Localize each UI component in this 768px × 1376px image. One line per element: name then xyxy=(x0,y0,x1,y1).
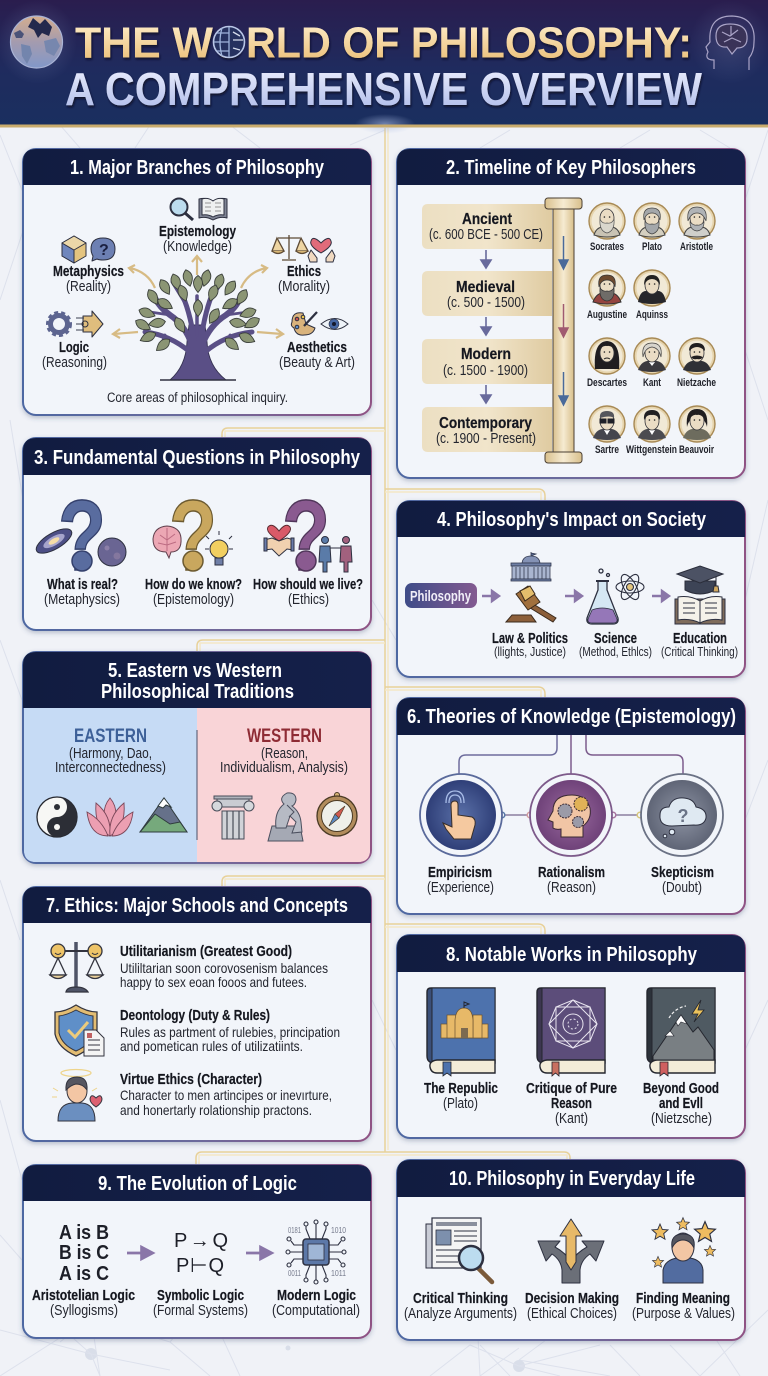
era: ancient: (c. 600 BCE - 500 CE) xyxy=(429,227,543,243)
label: empiricism xyxy=(427,865,494,896)
panel 8: notable works xyxy=(397,935,745,1138)
heading 6 xyxy=(397,698,745,735)
label: critique: Critique of Pure xyxy=(526,1081,617,1097)
portrait: Aristotle xyxy=(679,203,715,239)
label: critical thinking xyxy=(404,1291,517,1322)
syllogism statements xyxy=(59,1222,109,1285)
icon: eye xyxy=(321,318,348,330)
icon: cube xyxy=(62,236,86,263)
icon: scales xyxy=(272,235,308,260)
heading 1: 1. Major Branches of Philosophy xyxy=(70,157,325,179)
icon: heart in hands xyxy=(308,238,335,262)
arrow xyxy=(652,591,669,601)
syllogism statements: A is B xyxy=(59,1222,109,1244)
label: education xyxy=(661,631,738,659)
icon: computer chip: 0181 xyxy=(288,1226,301,1235)
arrow xyxy=(481,385,491,403)
label: finding meaning xyxy=(632,1291,735,1322)
text: virtue ethics xyxy=(120,1072,332,1118)
eastern text: (Harmony, Dao, xyxy=(69,746,152,762)
label: aristotelian: (Syllogisms) xyxy=(50,1303,118,1319)
label: critique xyxy=(526,1081,617,1127)
arrow xyxy=(246,1248,272,1258)
icon: graduation cap xyxy=(677,566,723,594)
label: modern: (Computational) xyxy=(272,1303,360,1319)
label: row 4 names xyxy=(595,444,715,456)
portrait: Plato xyxy=(634,203,670,239)
label: logic: Logic xyxy=(59,340,89,356)
label: modern: Modern Logic xyxy=(277,1288,356,1304)
text: virtue ethics: and honertarly rolationship practons. xyxy=(120,1102,312,1118)
text: virtue ethics: Character to men artincipes or inevırture, xyxy=(120,1087,332,1103)
text: deontology: Rules as partment of rulebies, principation xyxy=(120,1024,340,1040)
portrait: Beauvoir xyxy=(679,406,715,442)
portrait: Socrates xyxy=(589,203,625,239)
arrow xyxy=(565,591,582,601)
arrow xyxy=(482,591,499,601)
icon: thought cloud: ? xyxy=(678,806,688,826)
title: line 1: THE W xyxy=(75,18,213,68)
icon: tree xyxy=(133,269,262,380)
label: row 3 names: Nietzache xyxy=(677,377,716,389)
heading 1 xyxy=(23,149,371,185)
philosophy pill: Philosophy xyxy=(410,589,471,605)
western text: WESTERN xyxy=(247,726,322,747)
label: symbolic: (Formal Systems) xyxy=(153,1303,248,1319)
icon: logic arrow xyxy=(76,311,103,337)
label: row 4 names: Sartre xyxy=(595,444,619,456)
portrait: Sartre xyxy=(589,406,625,442)
era: medieval: Medieval xyxy=(456,279,515,296)
label: republic xyxy=(424,1081,498,1112)
title: line 1: O xyxy=(213,18,244,68)
label: aristotelian xyxy=(32,1288,135,1319)
label: row 3 names: Kant xyxy=(643,377,661,389)
era: ancient xyxy=(422,204,552,249)
heading 5: 5. Eastern vs Western xyxy=(108,660,282,682)
icon: head with gears xyxy=(548,795,590,837)
text: utilitarianism xyxy=(120,944,328,990)
label: beyond good and evil: and Evll xyxy=(659,1096,703,1112)
text: virtue ethics: Virtue Ethics (Character) xyxy=(120,1072,262,1088)
portrait: Augustine xyxy=(589,270,625,306)
icon: person with stars xyxy=(652,1218,716,1283)
icon: question bubble xyxy=(91,238,115,261)
label: row 2 names xyxy=(587,309,668,321)
label: critical thinking: (Analyze Arguments) xyxy=(404,1306,517,1322)
western background xyxy=(197,708,370,862)
syllogism statements: B is C xyxy=(59,1242,109,1264)
label: republic: The Republic xyxy=(424,1081,498,1097)
label: modern xyxy=(272,1288,360,1319)
label: ethics: (Morality) xyxy=(278,279,330,295)
icon: capitol xyxy=(511,552,551,581)
label: How do we know? xyxy=(145,577,242,593)
label: logic: (Reasoning) xyxy=(42,355,107,371)
label: critique: Reason xyxy=(551,1096,592,1112)
label: law and politics xyxy=(492,631,568,659)
heading 8: 8. Notable Works in Philosophy xyxy=(446,944,698,966)
label: republic: (Plato) xyxy=(443,1096,478,1112)
icon: metaphysics question with galaxy and planet: ? xyxy=(58,480,106,592)
label: How should we live? xyxy=(253,577,363,593)
icon: head with brain xyxy=(706,16,754,70)
icon: ethics question with handshake and people: ? xyxy=(282,480,330,592)
text: deontology: Deontology (Duty & Rules) xyxy=(120,1008,270,1024)
era: modern: Modern xyxy=(461,346,511,363)
label: (Epistemology) xyxy=(153,592,234,608)
icon: column xyxy=(212,796,254,839)
icon: pointing hand xyxy=(443,791,475,839)
era: medieval: (c. 500 - 1500) xyxy=(447,295,525,311)
label: beyond good and evil: Beyond Good xyxy=(643,1081,719,1097)
label: What is real? xyxy=(47,577,118,593)
era: ancient: Ancient xyxy=(462,211,513,228)
label: rationalism: (Reason) xyxy=(547,880,596,896)
icon: question bubble: ? xyxy=(99,242,109,259)
era: modern: (c. 1500 - 1900) xyxy=(443,363,528,379)
label: row 1 names xyxy=(590,241,713,253)
heading 3 xyxy=(23,438,371,475)
label: empiricism: (Experience) xyxy=(427,880,494,896)
portrait: Nietzsche xyxy=(679,338,715,374)
panel 3: fundamental questions xyxy=(23,438,371,630)
label: row 4 names: Beauvoir xyxy=(679,444,715,456)
label: (Metaphysics) xyxy=(44,592,120,608)
text: utilitarianism: Utilitarianism (Greatest Good) xyxy=(120,944,292,960)
icon: decision arrows xyxy=(538,1219,604,1283)
label: skepticism xyxy=(651,865,714,896)
eastern text xyxy=(55,726,166,776)
title: line 1: RLD OF PHILOSOPHY: xyxy=(246,18,692,68)
icon: gear xyxy=(48,312,70,336)
western text: Individualism, Analysis) xyxy=(220,760,348,776)
label: metaphysics: (Reality) xyxy=(66,279,111,295)
label xyxy=(145,577,242,608)
icon: computer chip: 1011 xyxy=(331,1269,346,1278)
label: law and politics: Law & Politics xyxy=(492,631,568,647)
icon: compass xyxy=(317,792,357,836)
philosophy pill xyxy=(405,583,477,608)
panel 6: theories of knowledge xyxy=(397,698,745,914)
icon: atom xyxy=(616,572,644,602)
heading 3: 3. Fundamental Questions in Philosophy xyxy=(34,447,361,469)
label: symbolic xyxy=(153,1288,248,1319)
label xyxy=(44,577,120,608)
heading 2: 2. Timeline of Key Philosophers xyxy=(446,157,696,179)
label: epistemology xyxy=(159,224,236,255)
label: row 3 names xyxy=(587,377,716,389)
book: beyond good and evil xyxy=(647,988,715,1076)
era: modern xyxy=(422,339,552,384)
label: beyond good and evil xyxy=(643,1081,719,1127)
text: deontology xyxy=(120,1008,340,1054)
heading 4: 4. Philosophy's Impact on Society xyxy=(437,509,707,531)
heading 7 xyxy=(23,887,371,923)
icon: computer chip: 1010 xyxy=(331,1226,346,1235)
text: utilitarianism: Utililtarian soon corovosenism balances xyxy=(120,960,328,976)
label: aristotelian: Aristotelian Logic xyxy=(32,1288,135,1304)
label: row 1 names: Plato xyxy=(642,241,662,253)
panel 9: evolution of logic xyxy=(23,1165,371,1338)
heading 5: Philosophical Traditions xyxy=(101,681,294,703)
label: finding meaning: (Purpose & Values) xyxy=(632,1306,735,1322)
era: medieval xyxy=(422,271,552,316)
eastern text: EASTERN xyxy=(74,726,147,747)
eastern background xyxy=(24,708,197,862)
label: education: (Critical Thinking) xyxy=(661,645,738,659)
portrait: Wittgenstein xyxy=(634,406,670,442)
heading 2 xyxy=(397,149,745,185)
era: contemporary: (c. 1900 - Present) xyxy=(436,431,536,447)
panel 2: timeline xyxy=(397,149,745,478)
portrait: Aquinas xyxy=(634,270,670,306)
panel 10: everyday life xyxy=(397,1160,745,1340)
portrait: Descartes xyxy=(589,338,625,374)
label: epistemology: Epistemology xyxy=(159,224,236,240)
label: row 1 names: Aristotle xyxy=(680,241,713,253)
syllogism statements: A is C xyxy=(59,1263,109,1285)
label: aesthetics: Aesthetics xyxy=(287,340,347,356)
arrow xyxy=(481,317,491,335)
icon: magnifier xyxy=(170,198,193,220)
label: row 2 names: Aquinss xyxy=(636,309,668,321)
label: critique: (Kant) xyxy=(555,1111,588,1127)
arrow xyxy=(481,250,491,268)
gold connector lines xyxy=(196,128,570,1165)
icon: epistemology question with brain and bulb: ? xyxy=(169,480,217,592)
icon: yin yang xyxy=(37,797,77,837)
arrow xyxy=(127,1248,152,1258)
heading 5 xyxy=(23,652,371,708)
label: law and politics: (llights, Justice) xyxy=(494,645,566,659)
heading 9: 9. The Evolution of Logic xyxy=(98,1173,297,1195)
panel 5: eastern vs western xyxy=(23,652,371,863)
icon: lotus xyxy=(87,798,133,836)
label: (Ethics) xyxy=(288,592,329,608)
icon: book xyxy=(199,198,227,220)
western text: (Reason, xyxy=(261,746,308,762)
empiricism circle xyxy=(420,774,502,856)
label: row 2 names: Augustine xyxy=(587,309,627,321)
symbolic formulas: P → Q xyxy=(174,1230,228,1252)
heading 7: 7. Ethics: Major Schools and Concepts xyxy=(46,895,348,917)
icon: computer chip: 0011 xyxy=(288,1269,301,1278)
icon: computer chip xyxy=(286,1220,346,1284)
icon: newspaper and magnifier xyxy=(426,1218,492,1282)
label: rationalism: Rationalism xyxy=(538,865,605,881)
icon: globe xyxy=(10,16,62,68)
panel 7: ethics xyxy=(23,887,371,1141)
label: empiricism: Empiricism xyxy=(428,865,492,881)
label: science: (Method, Ethlcs) xyxy=(579,645,652,659)
label: row 4 names: Wittgenstein xyxy=(626,444,677,456)
heading 9 xyxy=(23,1165,371,1201)
label: symbolic: Symbolic Logic xyxy=(157,1288,244,1304)
label: row 1 names: Socrates xyxy=(590,241,624,253)
arrows from tree xyxy=(113,256,283,338)
era: contemporary xyxy=(422,407,552,452)
western text xyxy=(220,726,348,776)
panel 1: major branches xyxy=(23,149,371,415)
heading 10: 10. Philosophy in Everyday Life xyxy=(449,1168,695,1190)
label: skepticism: (Doubt) xyxy=(662,880,702,896)
book: the republic xyxy=(427,988,495,1076)
icon: thinker statue xyxy=(268,793,303,841)
skepticism circle xyxy=(641,774,723,856)
label: science xyxy=(579,631,652,659)
heading 10 xyxy=(397,1160,745,1197)
connectors xyxy=(459,735,683,818)
label: beyond good and evil: (Nietzsche) xyxy=(651,1111,712,1127)
heading 8 xyxy=(397,935,745,972)
label: logic xyxy=(42,340,107,371)
icon: ethics question with handshake and people xyxy=(264,480,352,592)
panel 4: impact on society xyxy=(397,501,745,677)
heading 4 xyxy=(397,501,745,537)
label: rationalism xyxy=(538,865,605,896)
text: deontology: and pometican rules of utilizatiints. xyxy=(120,1038,303,1054)
icon: shield with document xyxy=(55,1005,104,1056)
label: metaphysics xyxy=(53,264,124,295)
label: finding meaning: Finding Meaning xyxy=(636,1291,730,1307)
symbolic formulas xyxy=(174,1230,228,1277)
icon: flask xyxy=(587,569,618,624)
era: contemporary: Contemporary xyxy=(439,415,532,432)
label: decision making: Decision Making xyxy=(525,1291,619,1307)
label: metaphysics: Metaphysics xyxy=(53,264,124,280)
label: decision making xyxy=(525,1291,619,1322)
icon: mountains xyxy=(140,798,187,832)
label xyxy=(253,577,363,608)
title: line 2: A COMPREHENSIVE OVERVIEW xyxy=(65,63,703,115)
symbolic formulas: P ⊢ Q xyxy=(176,1255,224,1277)
label: aesthetics xyxy=(279,340,355,371)
title banner xyxy=(0,0,768,134)
icon: virtue person with halo xyxy=(52,1070,102,1121)
label: ethics: Ethics xyxy=(287,264,321,280)
label: epistemology: (Knowledge) xyxy=(163,239,232,255)
caption: Core areas of philosophical inquiry. xyxy=(107,390,288,405)
label: critical thinking: Critical Thinking xyxy=(413,1291,508,1307)
icon: metaphysics question with galaxy and planet xyxy=(33,480,126,592)
icon: palette xyxy=(291,312,317,335)
label: education: Education xyxy=(673,631,727,647)
portrait: Kant xyxy=(634,338,670,374)
label: row 3 names: Descartes xyxy=(587,377,627,389)
icon: balance scale with faces xyxy=(50,942,103,992)
eastern text: Interconnectedness) xyxy=(55,760,166,776)
label: skepticism: Skepticism xyxy=(651,865,714,881)
label: decision making: (Ethical Choices) xyxy=(527,1306,617,1322)
rationalism circle xyxy=(530,774,612,856)
icon: open book xyxy=(675,596,725,624)
book: critique xyxy=(537,988,605,1076)
label: science: Science xyxy=(594,631,637,647)
icon: brain globe letter xyxy=(214,26,244,58)
icon: gavel xyxy=(506,586,556,622)
label: aesthetics: (Beauty & Art) xyxy=(279,355,355,371)
scroll xyxy=(545,198,582,463)
text: utilitarianism: happy to sex eoan fooos and futees. xyxy=(120,974,307,990)
label: ethics xyxy=(278,264,330,295)
